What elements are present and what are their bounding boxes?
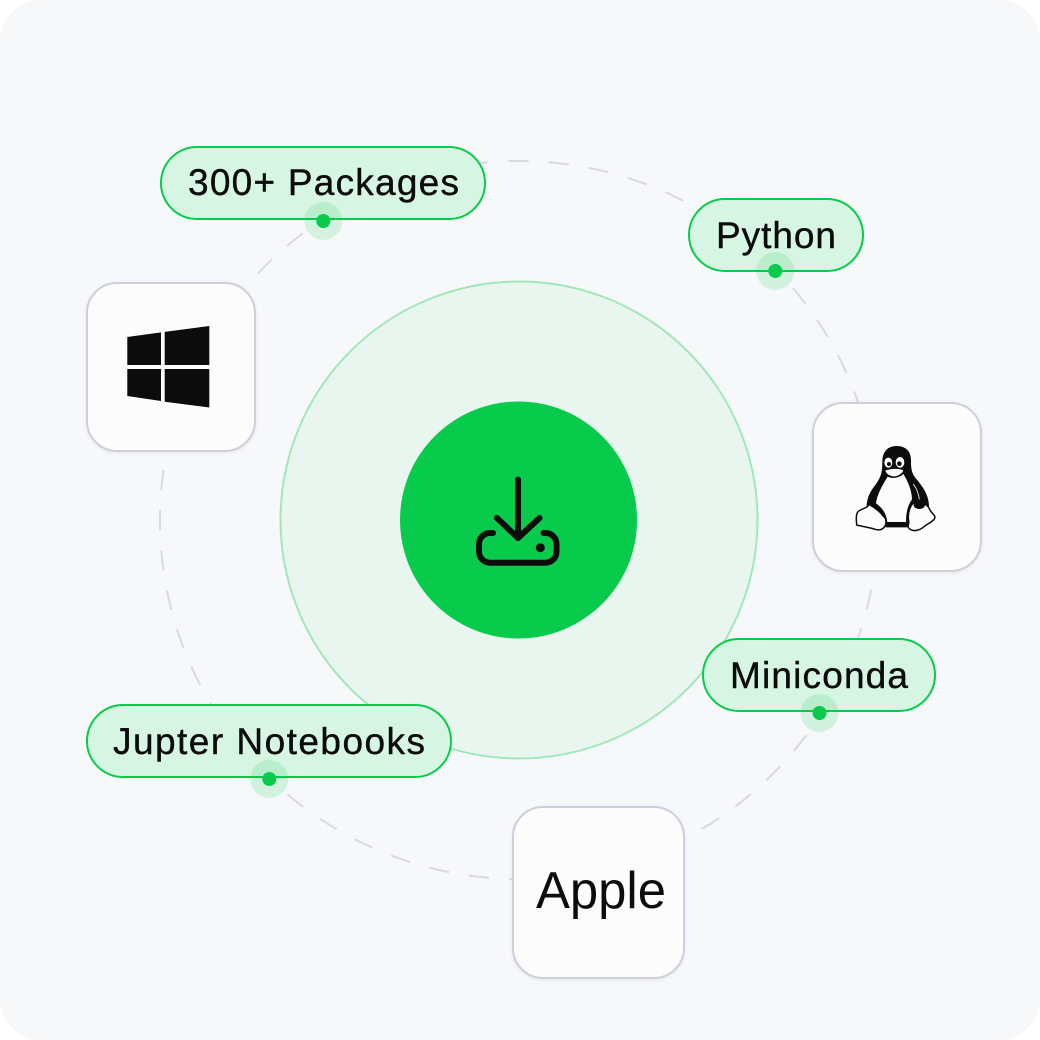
icon: Linux penguin (856, 446, 935, 531)
dot marker (304, 202, 342, 240)
Apple label: Apple (536, 862, 666, 920)
pill: Python (689, 199, 863, 290)
label: Miniconda (730, 655, 908, 696)
pill: Jupter Notebooks (87, 705, 451, 798)
card: Windows (87, 283, 255, 451)
icon: download to tray (479, 480, 557, 563)
dot marker (250, 760, 288, 798)
icon: Windows logo (127, 326, 209, 408)
card: Linux (813, 403, 981, 571)
label: Python (716, 215, 836, 256)
inner green circle (400, 402, 637, 638)
dot marker (800, 694, 838, 732)
card: Apple (513, 807, 684, 978)
pill: Miniconda (703, 639, 935, 732)
outer pale green circle (280, 282, 758, 758)
dot marker (756, 252, 794, 290)
label: Jupter Notebooks (113, 721, 425, 762)
label: 300+ Packages (188, 162, 459, 203)
pill: 300+ Packages (161, 147, 485, 240)
